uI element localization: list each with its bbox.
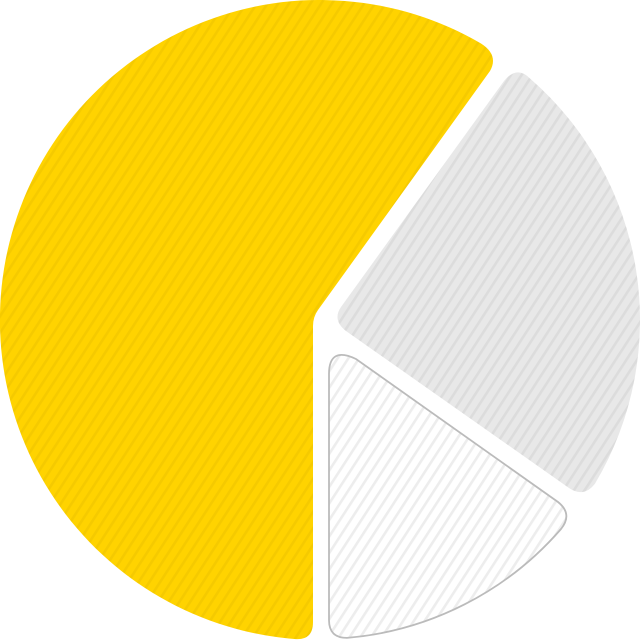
slice: white outlined (329, 355, 566, 638)
slice: yellow majority (0, 0, 493, 639)
slice: gray (337, 72, 640, 492)
